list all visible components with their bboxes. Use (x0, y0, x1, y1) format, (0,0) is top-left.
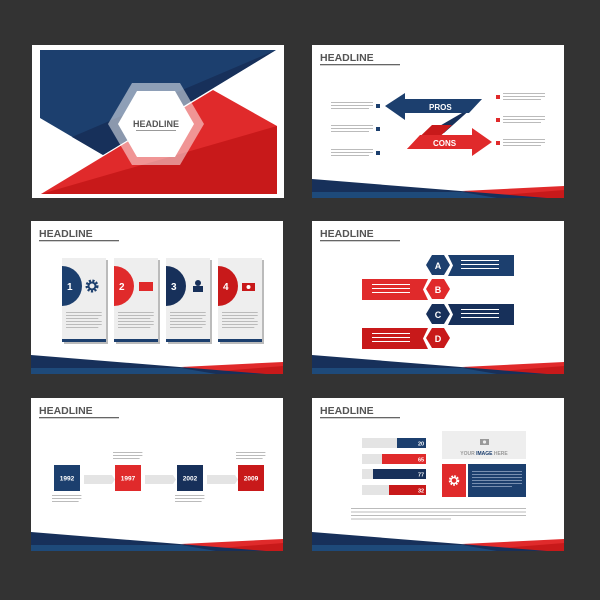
bar chart (362, 438, 426, 495)
bar chart: 65 (418, 458, 424, 464)
heading (39, 405, 119, 418)
heading: HEADLINE (39, 405, 93, 417)
cards: 2 (119, 282, 125, 293)
arrow: pros: PROS (429, 103, 452, 112)
panel: title slide (32, 45, 284, 198)
arrow: pros (385, 93, 482, 149)
bar chart: 32 (418, 488, 424, 494)
bar chart: 20 (418, 442, 424, 448)
bar chart: 77 (418, 472, 424, 478)
timeline: 2009 (244, 476, 259, 482)
heading (320, 405, 400, 418)
list items: B (435, 285, 442, 295)
cards: 1 (67, 282, 73, 293)
arrow: cons (407, 128, 492, 156)
heading: HEADLINE (39, 228, 93, 240)
timeline: 1992 (60, 476, 75, 482)
list items: A (435, 261, 442, 271)
heading (39, 228, 119, 241)
icon: hexagon headline (108, 83, 204, 165)
image placeholder (442, 431, 526, 497)
text block (351, 508, 526, 520)
timeline: 1997 (121, 476, 136, 482)
bullets left (331, 102, 380, 156)
heading: HEADLINE (320, 52, 374, 64)
panel: four cards (31, 221, 283, 374)
image placeholder: YOUR IMAGE HERE (460, 451, 508, 457)
list items: C (435, 310, 442, 320)
list items (362, 255, 514, 349)
panel: ABCD list (312, 221, 564, 374)
panel: timeline (31, 398, 283, 551)
panel: bars and image (312, 398, 564, 551)
icon: hexagon headline: HEADLINE (133, 119, 179, 129)
heading: HEADLINE (320, 405, 374, 417)
heading (320, 52, 400, 65)
timeline: 2002 (183, 476, 198, 482)
bullets right (496, 93, 545, 146)
timeline (52, 452, 265, 502)
arrow: cons: CONS (433, 139, 457, 148)
cards (62, 258, 264, 344)
heading (320, 228, 400, 241)
cards: 4 (223, 282, 229, 293)
heading: HEADLINE (320, 228, 374, 240)
panel: pros and cons (312, 45, 564, 198)
list items: D (435, 334, 442, 344)
cards: 3 (171, 282, 177, 293)
